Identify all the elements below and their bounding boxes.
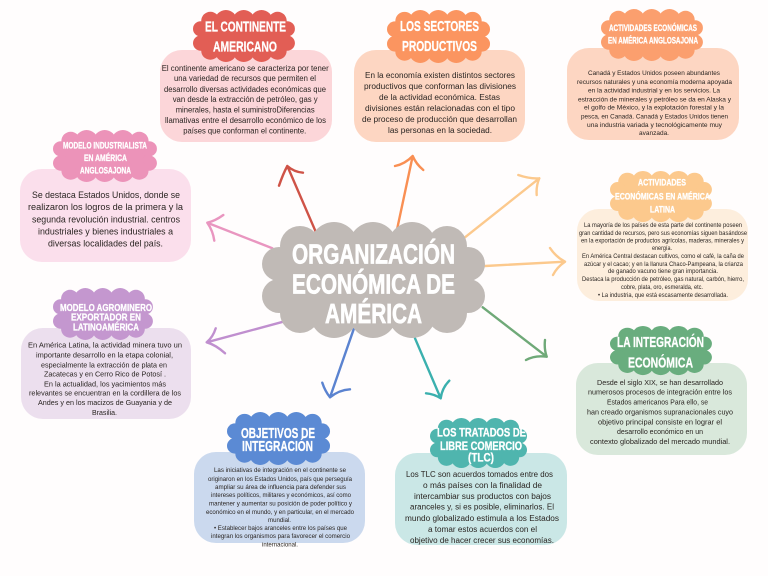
panel: Actividades económicas en América anglosajona: el golfo de México, y la explotación forestal y la xyxy=(584,104,724,111)
panel: La integración económica: Desde el siglo XIX, se han desarrollado xyxy=(597,380,723,387)
panel: Modelo agrominero exportador en Latinoamérica: importante desarrollo en la etapa colonial, xyxy=(36,352,173,359)
panel: Actividades económicas en América anglosajona: avanzada. xyxy=(639,130,669,137)
central topic: Organización económica de América: ECONÓMICA DE xyxy=(292,268,455,300)
panel: Objetivos de integración: económico en el mundo, y en particular, en el mercado xyxy=(206,509,355,516)
panel: Actividades económicas en América anglosajona xyxy=(567,9,739,140)
panel: La integración económica: contexto globalizado del mercado mundial. xyxy=(590,439,730,446)
panel: Modelo industrialista en América anglosajona: realizaron los logros de la primera y la xyxy=(28,202,183,212)
panel: Modelo industrialista en América anglosajona: ANGLOSAJONA xyxy=(80,166,131,176)
panel: Objetivos de integración: ampliar su área de influencia para defender sus xyxy=(215,484,346,491)
panel: La integración económica: Estados americanos Para ello, se xyxy=(607,400,708,407)
panel: Actividades económicas en América Latina xyxy=(577,171,748,301)
panel: Objetivos de integración: originaron en los Estados Unidos, país que perseguía xyxy=(208,476,353,483)
panel: Modelo agrominero exportador en Latinoamérica: MODELO AGROMINERO xyxy=(60,302,152,314)
panel: Actividades económicas en América anglosajona: estracción de minerales y petróleo se da en Alaska y xyxy=(578,96,732,103)
panel: Modelo agrominero exportador en Latinoamérica: Andes y en los macizos de Guayania y de xyxy=(38,400,172,407)
panel: Actividades económicas en América anglosajona: pesca, en Canadá. Canadá y Estados Unidos tienen xyxy=(581,113,728,120)
panel: La integración económica: numerosos procesos de integración entre los xyxy=(588,390,733,397)
arrow: to Los sectores productivos xyxy=(395,156,423,228)
panel: Actividades económicas en América anglosajona: ACTIVIDADES ECONÓMICAS xyxy=(609,22,697,34)
panel: Modelo agrominero exportador en Latinoamérica: especialmente la extracción de plata en xyxy=(41,362,167,369)
panel: Modelo agrominero exportador en Latinoamérica: En América Latina, la actividad minera tuvo un xyxy=(28,342,182,349)
panel: Modelo agrominero exportador en Latinoamérica: Zacatecas y en Cerro Rico de Potosí . xyxy=(44,371,166,378)
panel: La integración económica: LA INTEGRACIÓN xyxy=(617,333,704,351)
panel: Modelo agrominero exportador en Latinoamérica xyxy=(21,288,191,419)
panel: Actividades económicas en América Latina: en la exportación de productos agrícolas, maderas, minerales y xyxy=(581,238,744,244)
central topic: Organización económica de América: AMÉRICA xyxy=(325,298,422,329)
panel: Los sectores productivos: LOS SECTORES xyxy=(400,18,479,35)
panel: Objetivos de integración: INTEGRACIÓN xyxy=(242,437,313,455)
panel: La integración económica xyxy=(576,326,747,455)
panel: Actividades económicas en América Latina: de ganado vacuno tiene gran importancia. xyxy=(608,269,718,275)
panel: Actividades económicas en América Latina: La mayoría de los países de esta parte del continente poseen xyxy=(584,223,742,229)
panel: Los sectores productivos: En la economía existen distintos sectores xyxy=(365,71,515,80)
panel: Los tratados de libre comercio: LOS TRATADOS DE xyxy=(437,426,526,440)
panel: Los tratados de libre comercio: a tomar estos acuerdos con el xyxy=(428,525,537,534)
panel: La integración económica: ECONÓMICA xyxy=(628,354,693,372)
arrow: to Actividades económicas en América anglosajona xyxy=(465,175,539,237)
panel: Actividades económicas en América Latina: En América Central destacan cultivos, como el café, la caña de xyxy=(582,254,745,260)
arrow: to Modelo agrominero exportador xyxy=(207,322,283,353)
central topic: Organización económica de América xyxy=(262,222,485,338)
panel: Modelo industrialista en América anglosajona: industriales y bienes industriales a xyxy=(38,226,173,236)
panel: Objetivos de integración: • Establecer bajos aranceles entre los países que xyxy=(214,525,348,532)
panel: Actividades económicas en América Latina: energía. xyxy=(652,246,672,252)
central topic: Organización económica de América: ORGANIZACIÓN xyxy=(292,238,455,270)
panel: Actividades económicas en América Latina: Destaca la producción de petróleo, gas natural, carbón, hierro, xyxy=(582,277,744,283)
panel: Los sectores productivos: de la actividad económica. Estas xyxy=(379,93,500,102)
panel: Objetivos de integración: internacional. xyxy=(262,542,298,548)
arrow: to Objetivos de integración xyxy=(322,328,354,397)
panel: Los tratados de libre comercio xyxy=(395,418,567,545)
panel: Actividades económicas en América anglosajona: EN AMÉRICA ANGLOSAJONA xyxy=(608,35,698,46)
panel: Los tratados de libre comercio: mundo globalizado estimula a los Estados xyxy=(405,514,559,523)
panel: Objetivos de integración: mundial. xyxy=(268,517,291,524)
panel: Actividades económicas en América Latina: ACTIVIDADES xyxy=(638,178,686,188)
panel: Actividades económicas en América Latina: azúcar y el cacao; y en la llanura Chaco-Pampeana, la crianza xyxy=(584,262,744,268)
arrow: to Actividades económicas en América Latina xyxy=(485,248,565,275)
panel: La integración económica: han creado organismos supranacionales cuyo xyxy=(587,410,733,417)
panel: Modelo industrialista en América anglosajona: Se destaca Estados Unidos, donde se xyxy=(32,190,180,200)
panel: La integración económica: objetivo principal consiste en lograr el xyxy=(598,420,722,427)
arrow: to Los tratados de libre comercio xyxy=(415,338,449,398)
panel: Los sectores productivos: PRODUCTIVOS xyxy=(402,38,477,55)
panel: El continente americano: desarrollo diversas actividades económicas que xyxy=(164,85,326,94)
panel: Los tratados de libre comercio: intercambiar sus productos con bajos xyxy=(414,492,551,501)
panel: Objetivos de integración: integran los organismos para favorecer el comercio xyxy=(211,533,351,540)
panel: Los sectores productivos: las personas en la sociedad. xyxy=(388,126,492,135)
panel: El continente americano: van desde la extracción de petróleo, gas y xyxy=(173,95,318,104)
arrow: to La integración económica xyxy=(483,307,547,360)
panel: Actividades económicas en América anglosajona: recursos naturales y una economía moderna apoyada xyxy=(577,79,732,86)
panel: Modelo industrialista en América anglosajona: MODELO INDUSTRIALISTA xyxy=(63,140,147,152)
panel: Los sectores productivos xyxy=(354,10,525,142)
panel: El continente americano: llamativas entre el desarrollo económico de los xyxy=(165,116,326,125)
panel: Los tratados de libre comercio: Los TLC son acuerdos tomados entre dos xyxy=(406,470,553,479)
panel: Modelo agrominero exportador en Latinoamérica: EXPORTADOR EN xyxy=(71,312,141,324)
panel: Los sectores productivos: productivos que conforman las divisiones xyxy=(364,82,516,91)
panel: El continente americano: El continente americano se caracteriza por tener xyxy=(162,64,329,73)
panel: El continente americano: minerales, hasta el suministroDiferencias xyxy=(176,106,315,115)
panel: Los sectores productivos: divisiones están relacionadas con el tipo xyxy=(365,104,516,113)
panel: Actividades económicas en América Latina: ECONÓMICAS EN AMÉRICA xyxy=(615,190,710,202)
panel: Modelo agrominero exportador en Latinoamérica: En la actualidad, los yacimientos más xyxy=(44,381,167,388)
panel: Los tratados de libre comercio: (TLC) xyxy=(468,451,494,465)
panel: La integración económica: desarrollo económico en un xyxy=(617,429,703,436)
panel: Modelo agrominero exportador en Latinoamérica: Brasilia. xyxy=(92,410,117,417)
panel: Objetivos de integración: intereses políticos, militares y económicos, así como xyxy=(211,492,352,499)
arrow: to Modelo industrialista xyxy=(207,215,272,248)
panel: Los sectores productivos: de proceso de producción que desarrollan xyxy=(362,115,517,124)
panel: El continente americano: EL CONTINENTE xyxy=(205,19,286,36)
panel: Objetivos de integración xyxy=(194,412,365,548)
panel: El continente americano: AMERICANO xyxy=(213,39,277,56)
panel: Actividades económicas en América Latina: • La industria, que está escasamente desarrollada. xyxy=(598,293,728,299)
panel: Objetivos de integración: mantener y aumentar su posición de poder político y xyxy=(209,500,353,508)
panel: Los tratados de libre comercio: aranceles y, si es posible, eliminarlos. El xyxy=(410,502,554,512)
panel: Objetivos de integración: Las iniciativas de integración en el continente se xyxy=(214,467,347,474)
panel: Modelo industrialista en América anglosajona: diversas localidades del país. xyxy=(48,238,163,248)
panel: Actividades económicas en América anglosajona: Canadá y Estados Unidos poseen abundantes xyxy=(588,70,721,77)
panel: Actividades económicas en América anglosajona: una industria variada y tecnológicamente muy xyxy=(587,122,723,129)
panel: Modelo industrialista en América anglosajona: segunda revolución industrial. centros xyxy=(32,214,180,224)
panel: Modelo industrialista en América anglosajona: EN AMÉRICA xyxy=(84,153,127,164)
panel: Actividades económicas en América Latina: gran cantidad de recursos, pero sus economías siguen basándose xyxy=(579,231,748,237)
panel: Objetivos de integración: OBJETIVOS DE xyxy=(241,425,315,442)
panel: El continente americano: una variedad de recursos que permiten el xyxy=(174,74,316,83)
panel: Los tratados de libre comercio: LIBRE COMERCIO xyxy=(440,439,522,453)
panel: Actividades económicas en América Latina: cobre, plata, oro, esmeralda, etc. xyxy=(621,285,703,291)
panel: Modelo agrominero exportador en Latinoamérica: relevantes se encuentran en la cordillera de los xyxy=(29,391,182,398)
panel: Actividades económicas en América Latina: LATINA xyxy=(650,204,675,216)
panel: Modelo agrominero exportador en Latinoamérica: LATINOAMÉRICA xyxy=(73,320,139,334)
panel: El continente americano: países que conforman el continente. xyxy=(183,126,306,135)
panel: El continente americano xyxy=(160,10,332,142)
panel: Actividades económicas en América anglosajona: en la actividad industrial y en los servicios. La xyxy=(588,87,720,94)
panel: Los tratados de libre comercio: objetivo de hacer crecer sus economías. xyxy=(410,536,554,545)
arrow: to El continente americano xyxy=(279,166,316,232)
panel: Los tratados de libre comercio: o más países con la finalidad de xyxy=(423,481,543,490)
panel: Modelo industrialista en América anglosajona xyxy=(20,130,191,262)
